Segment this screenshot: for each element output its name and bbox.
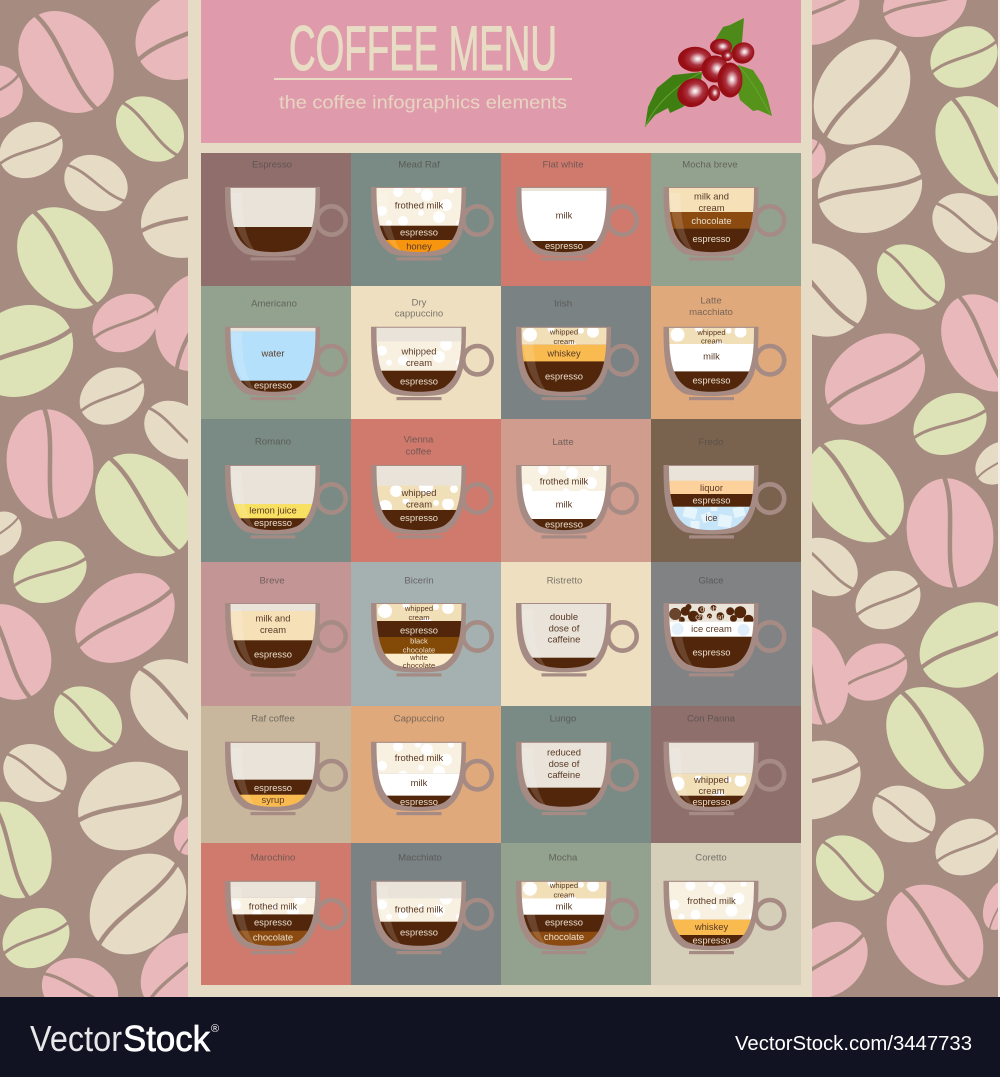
panel: Lungo: Lungo	[550, 714, 576, 724]
panel: Raf coffee: Raf coffee	[251, 714, 295, 724]
panel: Breve: Breve	[259, 576, 285, 586]
cup: Bicerin: white	[409, 653, 428, 662]
cup: Latte macchiato	[664, 327, 784, 400]
cup: Ristretto: dose of	[549, 622, 580, 633]
cup: Americano	[225, 327, 346, 400]
panel: Latte: Latte	[552, 437, 574, 448]
panel: Raf coffee	[201, 706, 351, 843]
cup: Mocha breve: espresso	[692, 233, 731, 244]
panel: Con Panna: Con Panna	[687, 714, 736, 724]
cup: Coretto	[664, 881, 784, 954]
cup: Fredo: liquor	[700, 482, 723, 493]
panel: Irish: Irish	[554, 298, 572, 310]
cup: Bicerin: espresso	[400, 624, 438, 635]
panel: Marochino: Marochino	[251, 852, 295, 864]
panel: Dry cappuccino: cappuccino	[395, 308, 443, 320]
title: COFFEE MENU	[289, 14, 557, 84]
cup: Bicerin: chocolate	[403, 661, 435, 670]
panel: Mocha: Mocha	[549, 852, 578, 864]
cup: Latte	[516, 465, 637, 538]
cup: Mocha: chocolate	[544, 931, 584, 942]
cup: Ristretto: double	[550, 611, 578, 622]
cup: Irish	[516, 327, 637, 400]
panel: Mead Raf	[351, 153, 501, 286]
cup: Mead Raf: frothed milk	[395, 199, 444, 210]
cup: Americano: water	[261, 348, 284, 359]
cup: Lungo: dose of	[549, 758, 580, 769]
panel: Macchiato: Macchiato	[398, 852, 442, 864]
cup: Raf coffee	[225, 742, 346, 815]
cup: Mocha: espresso	[545, 917, 583, 928]
cup: Flat white: milk	[556, 209, 573, 220]
cup: Glace: chocolate	[695, 613, 728, 622]
cup: Lungo: caffeine	[548, 769, 580, 780]
panel: Con Panna	[651, 706, 801, 843]
cup: Latte: frothed milk	[540, 475, 589, 486]
cup: Vienna coffee: cream	[406, 498, 432, 509]
cup: Ristretto	[516, 603, 637, 676]
cup: Mocha breve	[664, 187, 784, 260]
panel: Latte macchiato	[651, 286, 801, 419]
cup: Marochino: chocolate	[253, 932, 293, 943]
cup: Latte macchiato: whipped	[696, 328, 726, 337]
cup: Fredo: espresso	[692, 495, 731, 506]
cup: Irish: whipped	[549, 328, 578, 337]
cup: Mead Raf	[371, 187, 492, 260]
footer logo	[30, 1018, 219, 1059]
cup: Raf coffee: syrup	[262, 794, 284, 805]
cup: Romano	[225, 465, 346, 538]
cup: Mocha: cream	[553, 891, 575, 900]
cup: Dry cappuccino: whipped	[401, 346, 436, 357]
panel: Americano	[201, 286, 351, 419]
panel: Fredo: Fredo	[698, 437, 724, 448]
cup: Marochino	[225, 881, 346, 954]
panel: Dry cappuccino: Dry	[412, 297, 427, 308]
footer image id: VectorStock.com/3447733	[735, 1033, 972, 1055]
cup: Mocha: whipped	[549, 881, 578, 890]
cup: Vienna coffee: whipped	[401, 487, 436, 498]
icon: coffee berries with leaves	[645, 18, 772, 127]
panel: Bicerin	[351, 562, 501, 706]
cup: Mocha breve: chocolate	[691, 215, 732, 226]
bean pattern: right	[746, 0, 1000, 1017]
cup: Irish: whiskey	[546, 347, 581, 358]
panel: Mocha breve	[651, 153, 801, 286]
cup: Irish: cream	[553, 337, 575, 346]
bean pattern: left	[0, 0, 254, 1034]
panel: Cappuccino: Cappuccino	[394, 714, 444, 724]
panel: Vienna coffee	[351, 419, 501, 562]
cup: Lungo: reduced	[547, 747, 581, 758]
cup: Marochino: espresso	[254, 917, 292, 928]
subtitle: the coffee infographics elements	[279, 92, 567, 112]
cup: Con Panna: espresso	[692, 796, 731, 807]
cup: Americano: espresso	[254, 380, 292, 391]
cup: Cappuccino: milk	[411, 777, 428, 788]
cup: Mocha breve: cream	[698, 202, 725, 213]
footer logo: Vector	[30, 1018, 122, 1059]
panel: Cappuccino	[351, 706, 501, 843]
panel: Latte	[501, 419, 651, 562]
cup: Glace: espresso	[692, 646, 731, 657]
panel: Romano: Romano	[255, 436, 291, 448]
footer logo: Stock	[123, 1018, 211, 1059]
cup: Con Panna	[664, 742, 784, 815]
cup: Marochino: frothed milk	[249, 900, 298, 911]
cup: Dry cappuccino: cream	[406, 357, 432, 368]
cup: Espresso	[225, 187, 346, 260]
cup: Dry cappuccino: espresso	[400, 376, 438, 387]
cup: Cappuccino	[371, 742, 492, 815]
cup: Glace: ice cream	[691, 623, 732, 634]
cup: Latte macchiato: milk	[703, 351, 720, 362]
panel: Flat white	[501, 153, 651, 286]
cup: Mocha	[516, 881, 637, 954]
cup: Breve: espresso	[254, 649, 292, 660]
central cream frame	[188, 0, 812, 997]
panel: Marochino	[201, 843, 351, 985]
panel: Coretto: Coretto	[695, 852, 727, 864]
cup: Coretto: espresso	[692, 934, 731, 945]
cup: Lungo	[516, 742, 637, 815]
cup: Breve: milk and	[256, 612, 290, 623]
cup: Mocha: milk	[556, 900, 573, 911]
cup: Cappuccino: espresso	[400, 796, 438, 807]
cup: Con Panna: whipped	[693, 774, 729, 785]
cup: Irish: espresso	[545, 370, 583, 381]
panel: Lungo	[501, 706, 651, 843]
panel: Flat white: Flat white	[542, 160, 584, 170]
panel: Romano	[201, 419, 351, 562]
cup: Raf coffee: espresso	[254, 782, 292, 793]
panel: Bicerin: Bicerin	[404, 576, 434, 586]
panel: Latte macchiato: macchiato	[689, 307, 733, 318]
panel: Mead Raf: Mead Raf	[398, 160, 440, 170]
cup: Fredo	[664, 465, 784, 538]
panel: Vienna coffee: Vienna	[404, 434, 434, 446]
cup: Flat white: espresso	[545, 240, 583, 251]
cup: Macchiato	[371, 881, 492, 954]
cup: Breve	[225, 603, 346, 676]
cup: Latte macchiato: cream	[701, 337, 722, 346]
cup: Macchiato: frothed milk	[395, 903, 444, 914]
cup: Mead Raf: espresso	[400, 226, 438, 237]
panel: Espresso	[201, 153, 351, 286]
cup: Romano: espresso	[254, 517, 292, 528]
cup: Dry cappuccino	[371, 327, 492, 400]
panel: Irish	[501, 286, 651, 419]
cup: Ristretto: caffeine	[548, 634, 580, 645]
panel: Dry cappuccino	[371, 299, 494, 400]
cup: Bicerin: chocolate	[403, 645, 435, 654]
cup: Con Panna: cream	[698, 785, 725, 796]
cup: Fredo: ice	[706, 512, 717, 523]
cup: Bicerin: whipped	[404, 604, 433, 613]
cup: Vienna coffee	[371, 465, 492, 538]
panel: Fredo	[651, 419, 801, 562]
panel: Glace: Glace	[698, 576, 724, 586]
panel: Ristretto: Ristretto	[547, 576, 582, 586]
panel: Macchiato	[351, 843, 501, 985]
header banner	[201, 0, 801, 143]
cup: Breve: cream	[260, 624, 286, 635]
cup: Mead Raf: honey	[406, 240, 432, 251]
cup: Mocha breve: milk and	[694, 191, 729, 202]
footer logo: ®	[211, 1023, 219, 1035]
panel: Glace	[651, 562, 801, 706]
cup: Vienna coffee: espresso	[400, 512, 438, 523]
cup: Latte: milk	[556, 499, 573, 510]
panel: Mocha	[501, 843, 651, 985]
title underline	[274, 78, 572, 80]
footer bar	[0, 997, 1000, 1077]
panel: Breve	[201, 562, 351, 706]
panel: Latte macchiato: Latte	[700, 296, 722, 306]
cup: Flat white	[516, 187, 637, 260]
panel: Coretto	[651, 843, 801, 985]
panel: Americano: Americano	[251, 298, 297, 310]
cup: Latte macchiato: espresso	[692, 375, 731, 386]
cup: Latte: espresso	[545, 519, 583, 530]
cup: Bicerin	[371, 603, 492, 676]
cup: Bicerin: black	[410, 636, 428, 645]
cup: Coretto: frothed milk	[687, 895, 736, 906]
panel: Vienna coffee: coffee	[406, 446, 431, 457]
panel: Espresso: Espresso	[252, 160, 292, 170]
panel: Ristretto	[516, 577, 639, 676]
cup: Coretto: whiskey	[694, 921, 728, 932]
cup: Glace	[664, 603, 784, 676]
right edge strip	[998, 0, 1000, 997]
cup: Glace: double	[700, 604, 723, 613]
panel: Mocha breve: Mocha breve	[682, 160, 738, 170]
cup: Romano: lemon juice	[249, 505, 297, 516]
cup: Cappuccino: frothed milk	[395, 752, 444, 763]
cup: Bicerin: cream	[408, 613, 430, 622]
cup: Macchiato: espresso	[400, 926, 438, 937]
